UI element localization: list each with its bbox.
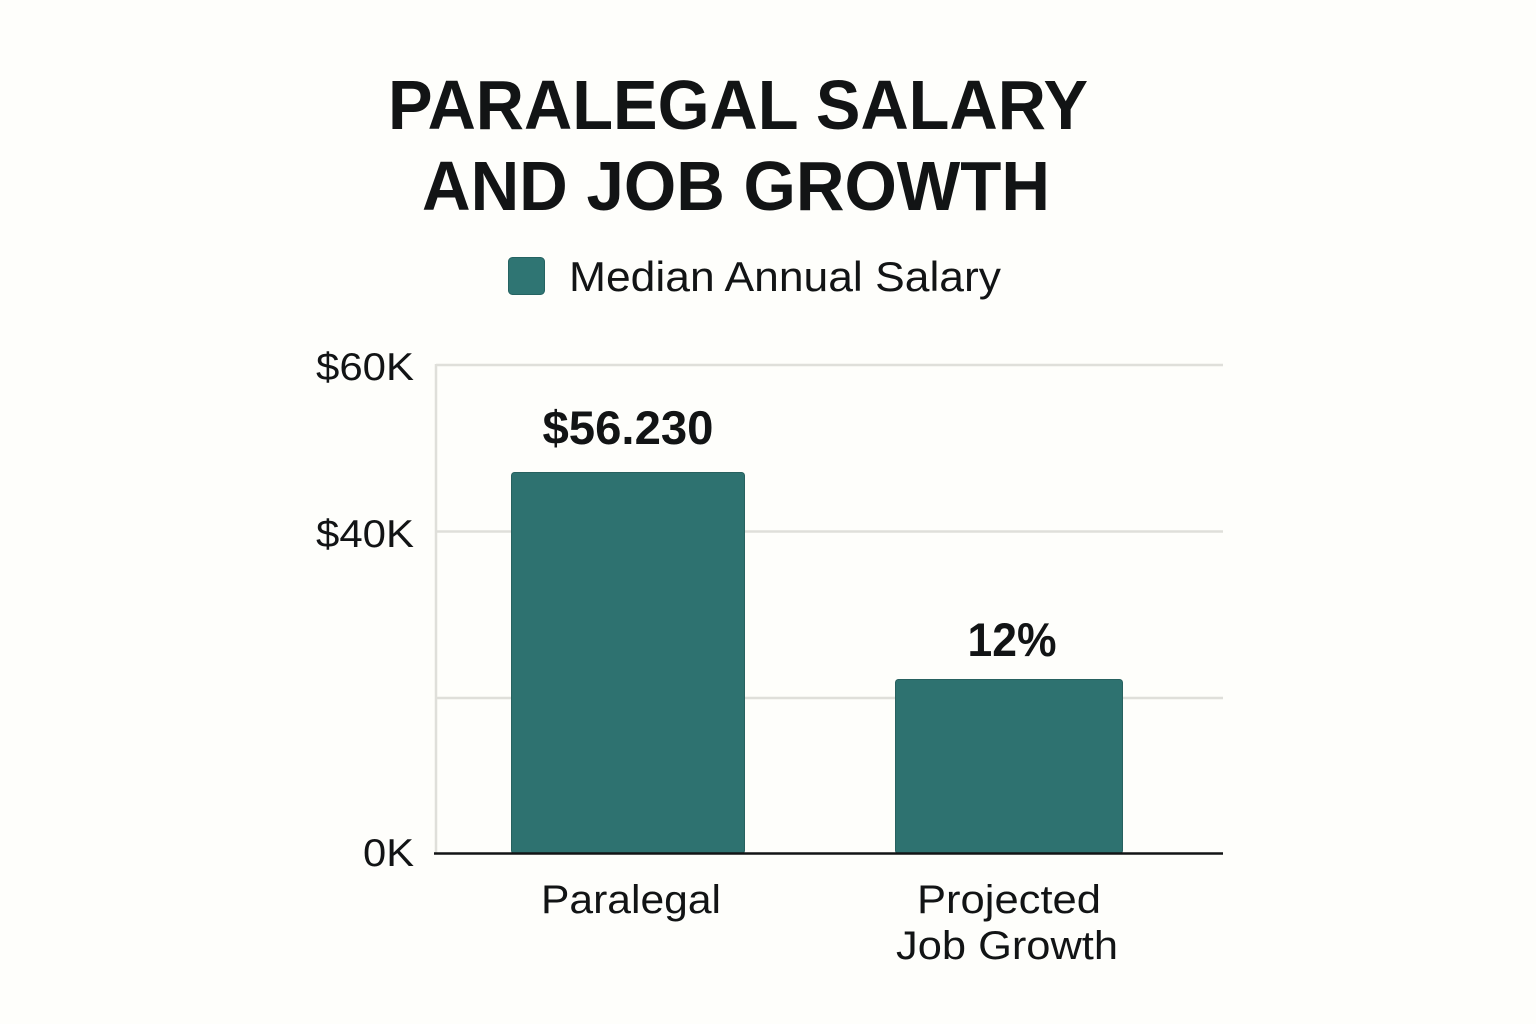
bar: Paralegal	[512, 472, 744, 854]
category label: Paralegal: Paralegal	[541, 878, 721, 922]
title	[388, 66, 1088, 225]
value label: $56.230: $56.230	[542, 401, 714, 454]
title: PARALEGAL SALARY	[388, 66, 1088, 144]
y axis labels: $60K	[316, 346, 414, 389]
category label: Projected Job Growth	[896, 878, 1118, 968]
y axis labels	[316, 346, 414, 875]
y axis labels: 0K	[363, 832, 414, 875]
bar chart	[316, 346, 1223, 968]
bar: Projected Job Growth	[896, 680, 1122, 854]
value label: 12%: 12%	[968, 613, 1056, 666]
title: AND JOB GROWTH	[422, 147, 1050, 225]
category label: Projected Job Growth: Job Growth	[896, 924, 1118, 968]
y axis and gridlines	[436, 364, 1223, 853]
x axis baseline	[434, 852, 1223, 855]
category label: Projected Job Growth: Projected	[917, 878, 1101, 922]
y axis labels: $40K	[316, 513, 414, 556]
legend: Median Annual Salary	[569, 253, 1001, 300]
